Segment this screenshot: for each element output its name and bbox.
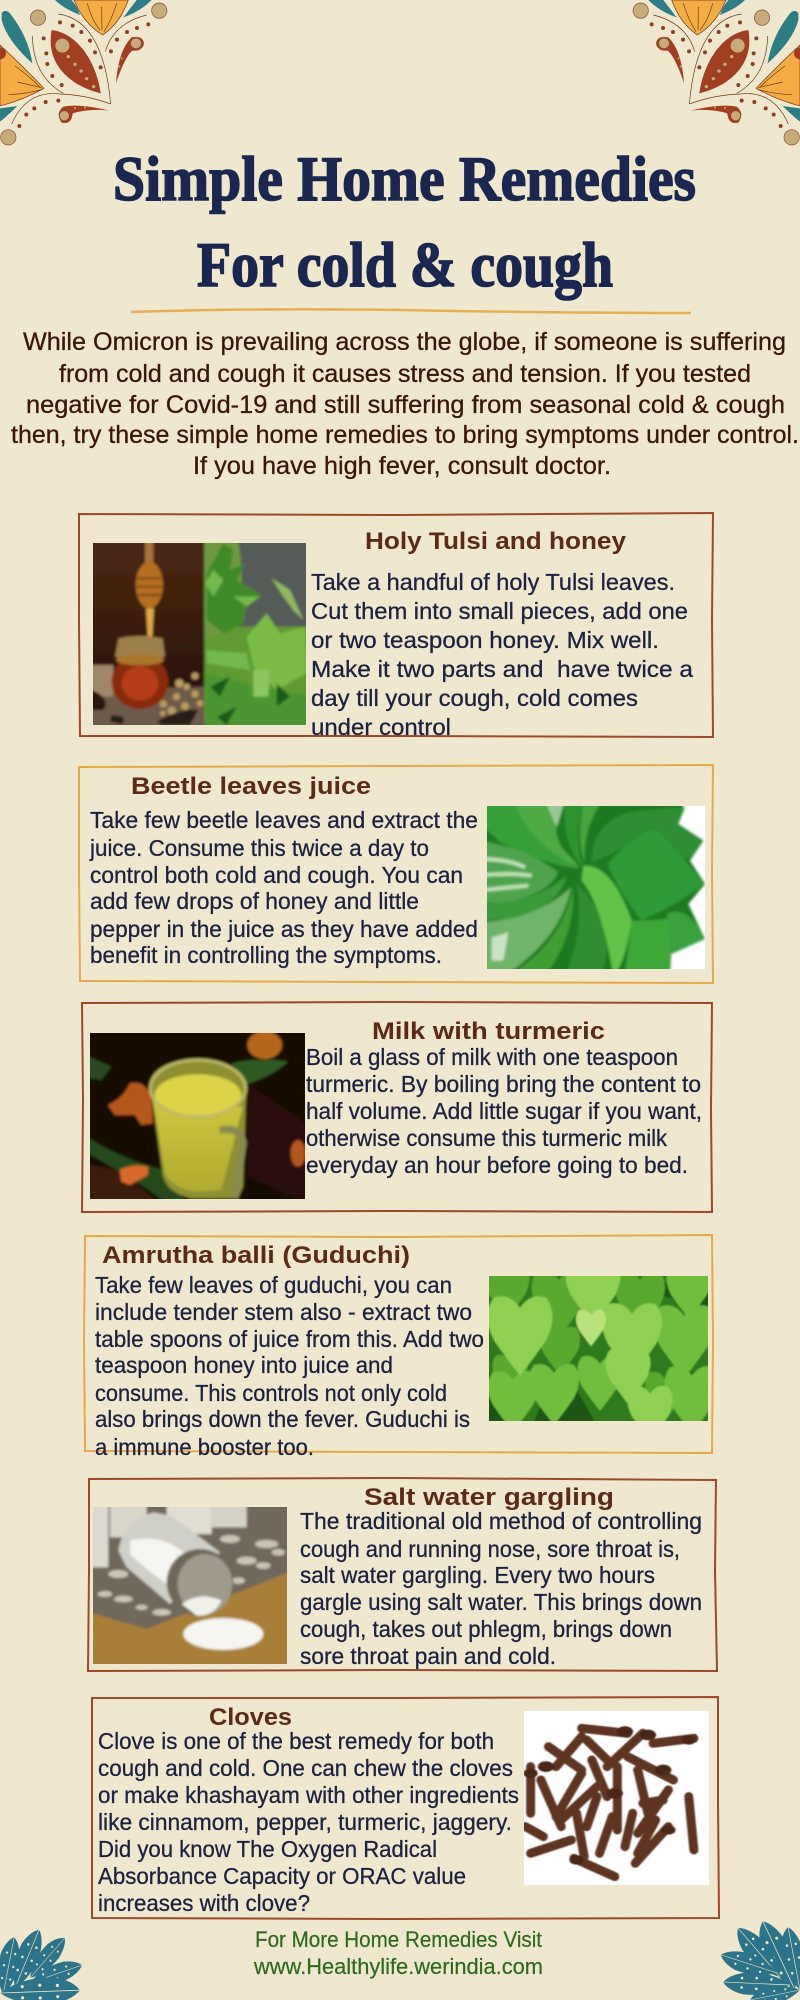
body text: like cinnamom, pepper, turmeric, jaggery. bbox=[98, 1809, 512, 1835]
body text: salt water gargling. Every two hours bbox=[300, 1562, 655, 1588]
body text: Boil a glass of milk with one teaspoon bbox=[306, 1044, 678, 1070]
body text: also brings down the fever. Guduchi is bbox=[95, 1406, 470, 1432]
body text: or make khashayam with other ingredients bbox=[98, 1782, 519, 1808]
body text: sore throat pain and cold. bbox=[300, 1643, 556, 1669]
body text: teaspoon honey into juice and bbox=[95, 1352, 393, 1378]
intro paragraph: If you have high fever, consult doctor. bbox=[193, 452, 611, 480]
heading: Milk with turmeric bbox=[372, 1018, 605, 1045]
intro paragraph bbox=[11, 328, 799, 480]
icon: leaves bottom left bbox=[0, 1926, 85, 2000]
panel: Milk with turmeric bbox=[81, 1002, 712, 1212]
icon: leaves bottom right bbox=[718, 1916, 800, 2000]
body text: gargle using salt water. This brings down bbox=[300, 1589, 702, 1615]
footer call to action bbox=[253, 1927, 543, 1979]
title: Simple Home Remedies bbox=[113, 144, 696, 214]
body text bbox=[311, 569, 693, 740]
body text bbox=[300, 1508, 702, 1669]
body text: everyday an hour before going to bed. bbox=[306, 1152, 688, 1178]
footer call to action: For More Home Remedies Visit bbox=[255, 1927, 542, 1952]
heading: Holy Tulsi and honey bbox=[365, 528, 627, 555]
body text: table spoons of juice from this. Add two bbox=[95, 1326, 484, 1352]
body text: consume. This controls not only cold bbox=[95, 1380, 447, 1406]
body text: pepper in the juice as they have added bbox=[90, 916, 478, 942]
photo: guduchi leaves bbox=[489, 1276, 708, 1421]
corner ornament: top right bbox=[633, 0, 800, 145]
body text: Make it two parts and have twice a bbox=[311, 656, 693, 682]
photo: salt shaker bbox=[93, 1507, 287, 1664]
photo: beetle leaves bbox=[487, 806, 705, 969]
body text: add few drops of honey and little bbox=[90, 888, 419, 914]
panel: Amrutha balli (Guduchi) bbox=[84, 1235, 720, 1460]
body text: Cut them into small pieces, add one bbox=[311, 598, 688, 624]
heading: Amrutha balli (Guduchi) bbox=[102, 1242, 410, 1269]
body text bbox=[89, 807, 478, 968]
body text: half volume. Add little sugar if you want, bbox=[306, 1098, 702, 1124]
heading: Beetle leaves juice bbox=[131, 773, 371, 800]
photo: cloves bbox=[523, 1711, 709, 1885]
photo: turmeric milk bbox=[90, 1033, 305, 1199]
footer call to action: www.Healthylife.werindia.com bbox=[253, 1954, 543, 1979]
body text: control both cold and cough. You can bbox=[90, 862, 463, 888]
body text: cough, takes out phlegm, brings down bbox=[300, 1616, 672, 1642]
corner ornament: top left bbox=[0, 0, 167, 145]
intro paragraph: then, try these simple home remedies to bring symptoms under control. bbox=[11, 421, 799, 449]
body text: day till your cough, cold comes bbox=[311, 685, 638, 711]
photo: honey jar and tulsi bbox=[93, 543, 306, 725]
body text: otherwise consume this turmeric milk bbox=[306, 1125, 667, 1151]
body text: juice. Consume this twice a day to bbox=[89, 835, 429, 861]
body text: Absorbance Capacity or ORAC value bbox=[98, 1863, 466, 1889]
body text: benefit in controlling the symptoms. bbox=[90, 942, 442, 968]
body text: Clove is one of the best remedy for both bbox=[98, 1728, 494, 1754]
body text: Take few beetle leaves and extract the bbox=[90, 807, 478, 833]
heading: Salt water gargling bbox=[364, 1484, 614, 1511]
body text: The traditional old method of controlling bbox=[300, 1508, 702, 1534]
body text bbox=[306, 1044, 702, 1178]
panel: Beetle leaves juice bbox=[79, 765, 713, 983]
body text: under control bbox=[311, 714, 451, 740]
body text: Take a handful of holy Tulsi leaves. bbox=[311, 569, 675, 595]
body text: include tender stem also - extract two bbox=[95, 1299, 472, 1325]
body text: increases with clove? bbox=[98, 1890, 310, 1916]
intro paragraph: from cold and cough it causes stress and tension. If you tested bbox=[59, 360, 751, 388]
body text: a immune booster too. bbox=[95, 1434, 314, 1460]
body text: Take few leaves of guduchi, you can bbox=[95, 1272, 452, 1298]
body text: turmeric. By boiling bring the content to bbox=[306, 1071, 701, 1097]
panel: Holy Tulsi and honey bbox=[79, 513, 713, 740]
panel: Cloves bbox=[92, 1697, 719, 1919]
intro paragraph: negative for Covid-19 and still suffering from seasonal cold & cough bbox=[26, 391, 785, 419]
body text: or two teaspoon honey. Mix well. bbox=[311, 627, 659, 653]
intro paragraph: While Omicron is prevailing across the globe, if someone is suffering bbox=[23, 328, 786, 356]
heading: Cloves bbox=[209, 1704, 292, 1731]
body text: cough and cold. One can chew the cloves bbox=[98, 1755, 513, 1781]
body text: Did you know The Oxygen Radical bbox=[98, 1836, 437, 1862]
panel: Salt water gargling bbox=[83, 1478, 717, 1671]
title: For cold & cough bbox=[197, 230, 613, 300]
body text: cough and running nose, sore throat is, bbox=[300, 1536, 680, 1562]
body text bbox=[95, 1272, 484, 1460]
title bbox=[113, 144, 696, 300]
body text bbox=[98, 1728, 519, 1916]
